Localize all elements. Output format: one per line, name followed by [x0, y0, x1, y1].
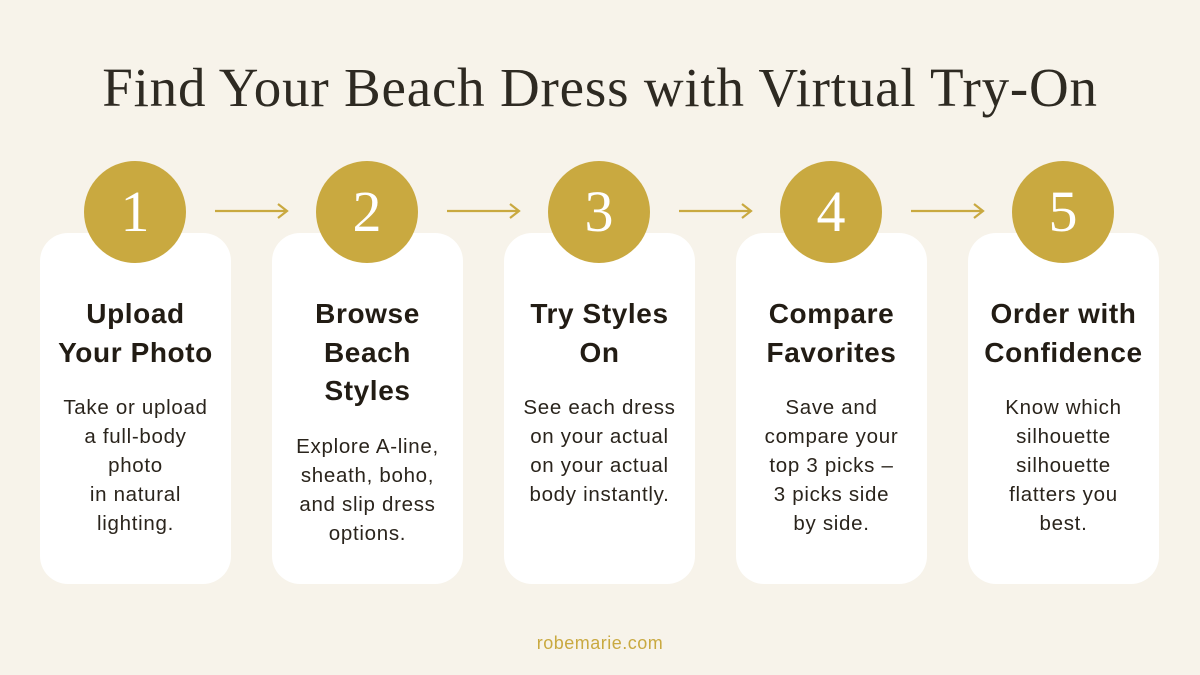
card 1: in natural [90, 483, 181, 506]
step circle 2 [316, 161, 418, 263]
step circle 1: 1 [120, 179, 150, 244]
card 5: best. [1040, 512, 1087, 535]
card 1: Upload [86, 298, 185, 329]
step circle 5: 5 [1048, 179, 1078, 244]
card 2: options. [329, 522, 406, 544]
step circle 1 [84, 161, 186, 263]
card 2: and slip dress [299, 492, 436, 516]
arrow 3 [679, 203, 753, 219]
arrow 2 [447, 203, 521, 219]
card 5: flatters you [1009, 483, 1118, 506]
card 5: Order with [990, 298, 1136, 329]
step circle 3 [548, 161, 650, 263]
title: Find Your Beach Dress with Virtual Try-On [102, 57, 1098, 118]
card 3: on your actual [530, 454, 669, 477]
card 5 [968, 233, 1159, 584]
card 2: Browse [315, 298, 420, 329]
arrow 4 [911, 203, 985, 219]
card 3: body instantly. [529, 483, 670, 506]
card 4: by side. [793, 512, 870, 535]
card 5: Know which [1005, 396, 1122, 419]
card 4: Compare [769, 298, 894, 329]
arrow 1 [215, 203, 289, 219]
card 2: Beach [324, 336, 411, 368]
card 3: on your actual [530, 425, 669, 448]
card 1: lighting. [97, 512, 174, 535]
step circle 4 [780, 161, 882, 263]
card 4 [736, 233, 927, 584]
card 1: a full-body [84, 425, 187, 448]
card 3: Try Styles [530, 298, 669, 329]
card 4: 3 picks side [774, 483, 889, 506]
card 1 [40, 233, 231, 584]
card 2: sheath, boho, [301, 464, 434, 486]
card 3 [504, 233, 695, 584]
card 1: photo [108, 454, 163, 477]
card 2 [272, 233, 463, 584]
step circle 2: 2 [352, 179, 382, 244]
step circle 5 [1012, 161, 1114, 263]
card 3: On [579, 336, 620, 368]
card 1: Take or upload [63, 396, 208, 419]
footer: robemarie.com [537, 633, 663, 653]
card 5: silhouette [1016, 425, 1111, 448]
card 4: top 3 picks – [769, 454, 894, 477]
card 4: compare your [765, 425, 898, 448]
step circle 3: 3 [584, 179, 614, 244]
card 5: Confidence [984, 336, 1143, 368]
card 4: Favorites [767, 336, 896, 368]
card 1: Your Photo [58, 336, 213, 368]
step circle 4: 4 [816, 179, 846, 244]
card 4: Save and [785, 396, 878, 419]
card 2: Explore A-line, [296, 434, 439, 458]
card 5: silhouette [1016, 454, 1111, 477]
card 3: See each dress [523, 396, 676, 419]
card 2: Styles [324, 375, 411, 406]
